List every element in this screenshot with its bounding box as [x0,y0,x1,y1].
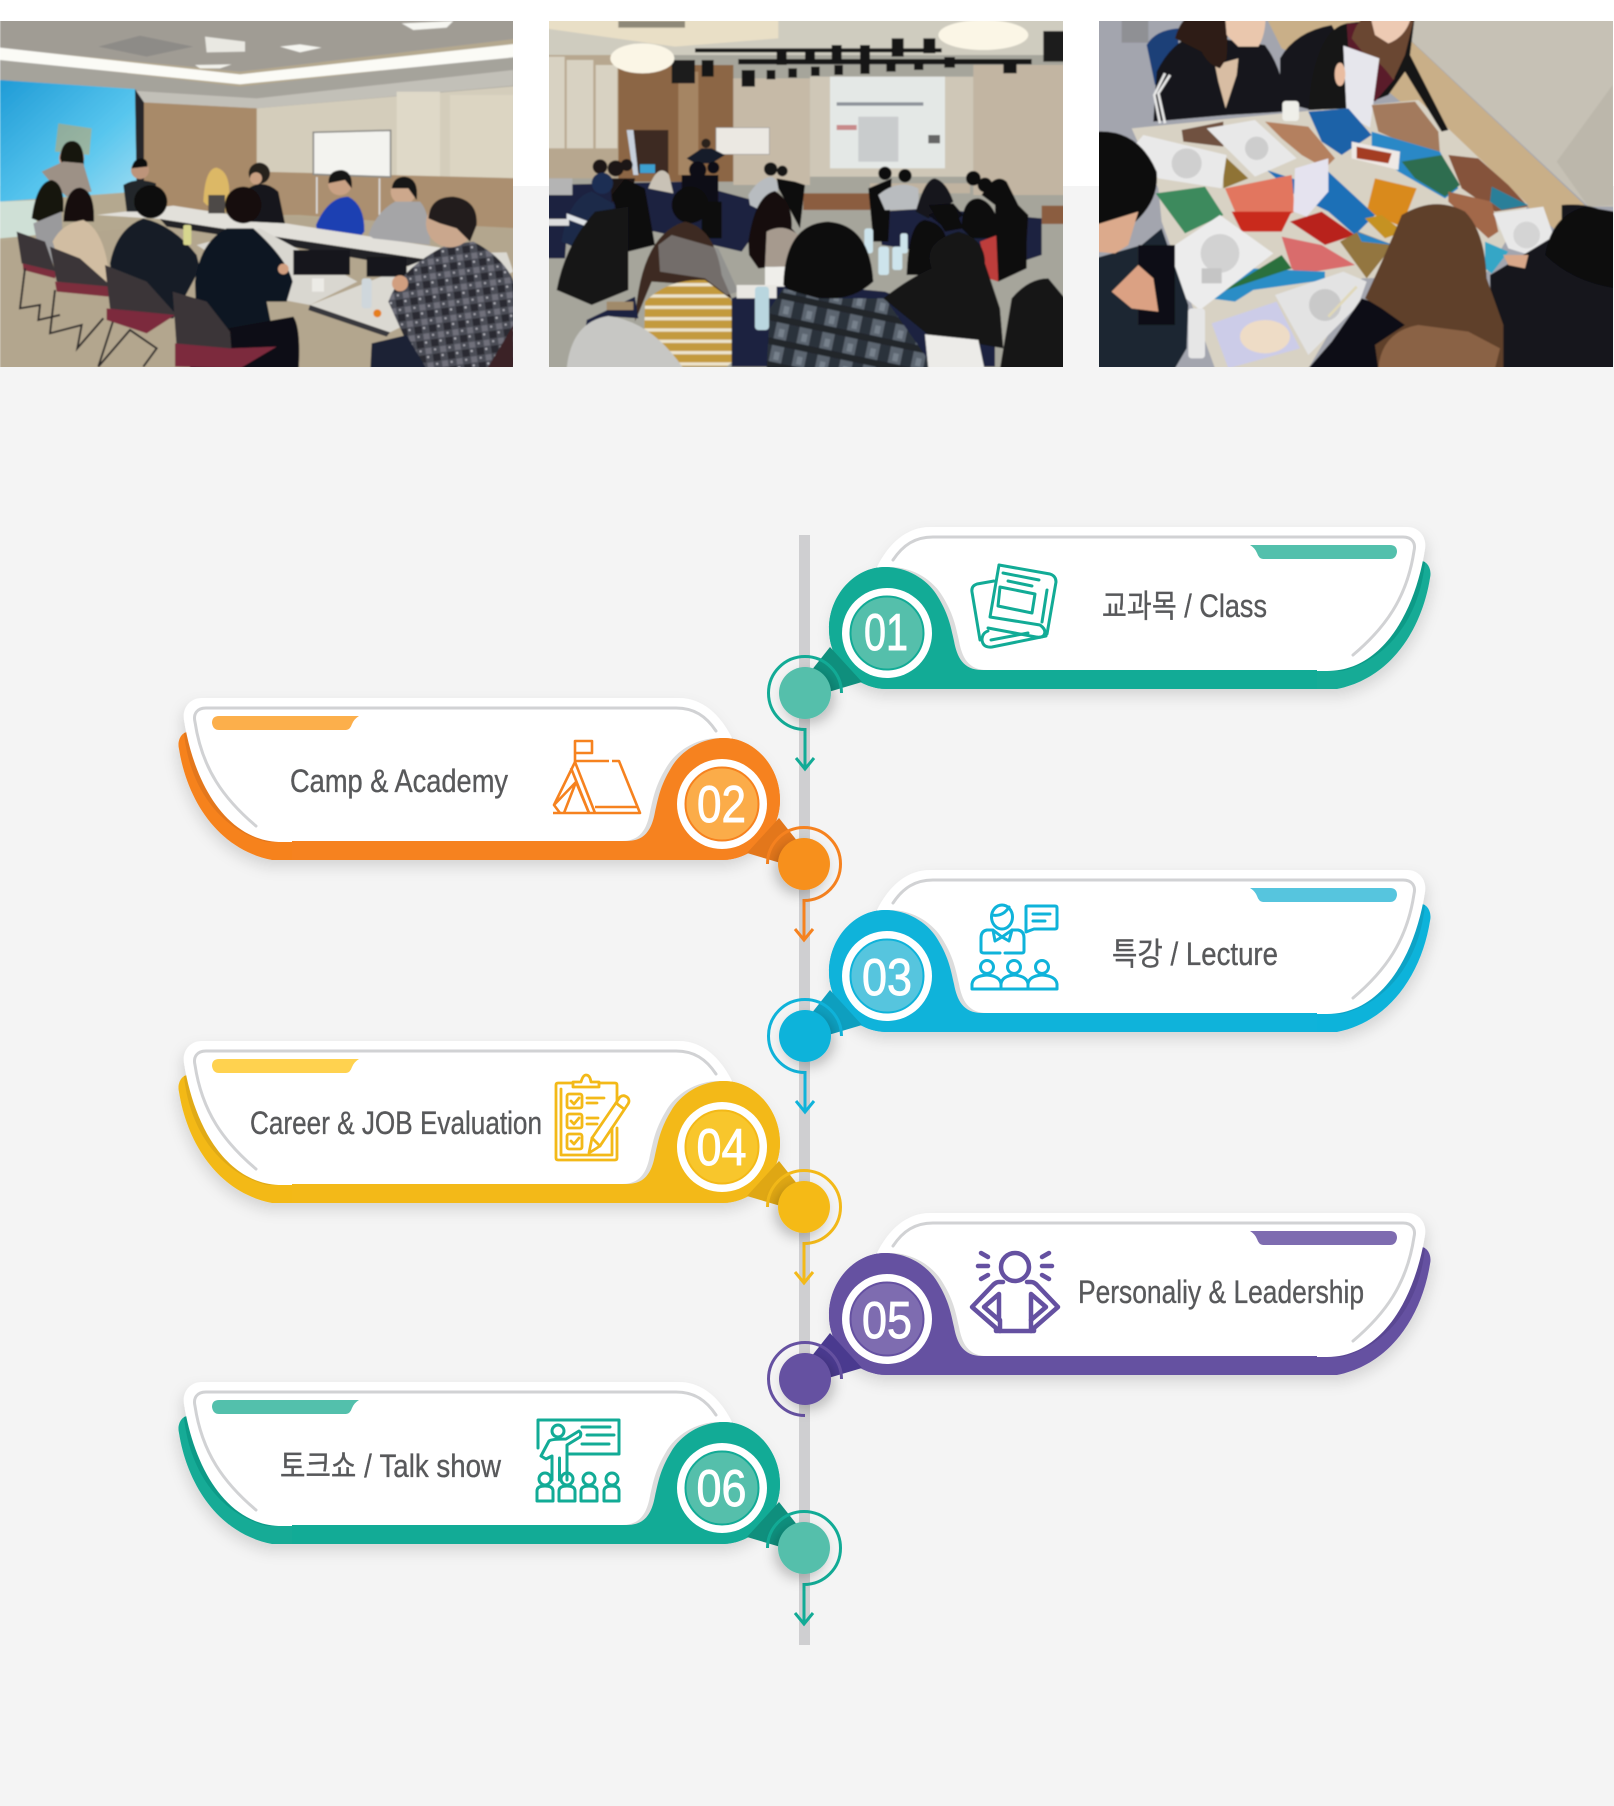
front dark people [134,185,167,218]
photo: seminar hall with presentation screen [545,15,1065,375]
table [1132,100,1528,368]
icon: tent [553,741,640,813]
number 01: 01 [864,604,908,662]
number 03: 03 [862,949,912,1007]
tables & far people [545,182,758,252]
label: personality and leadership: Personaliy & Leadership [1078,1274,1364,1310]
card 03 body [829,870,1431,1032]
left boy [1095,228,1188,368]
icon: lecturer and audience [972,905,1057,989]
photo: classroom with U-shaped tables [0,15,520,375]
card 01 body [829,527,1431,689]
card 06: talk show [178,1382,840,1624]
icon: book [972,565,1056,647]
label: career and job evaluation: Career & JOB Evaluation [250,1105,542,1141]
left women & chairs [32,180,64,222]
icon: clipboard with pencil [556,1075,629,1160]
back row people [58,152,86,164]
card 02: camp and academy [178,698,840,940]
card 05 body [829,1213,1431,1375]
collage pieces [1308,108,1372,155]
number 05: 05 [862,1292,912,1350]
card 02 body [178,698,780,860]
card 01: class [768,527,1431,769]
photo: workshop table with collage materials [1095,15,1614,375]
card 03: lecture [768,870,1431,1112]
tables [97,206,441,260]
number 04: 04 [696,1119,746,1177]
table items [362,278,372,308]
card 06 body [178,1382,780,1544]
label: lecture: 특강 / Lecture [1112,936,1278,972]
worksheets [1133,135,1227,188]
card 04: career and job evaluation [178,1041,840,1283]
front woman & right person [1490,204,1614,368]
label: class: 교과목 / Class [1102,588,1267,624]
speaker [701,139,711,148]
timeline vertical bar [799,535,810,1645]
icon: presenter and audience [537,1420,619,1501]
number 06: 06 [696,1460,746,1518]
label: talk show: 토크쇼 / Talk show [280,1448,502,1484]
number 02: 02 [697,776,746,834]
stage lighting truss [695,38,1032,87]
card 04 body [178,1041,780,1203]
front right man [388,242,520,375]
icon: person with hands on hips [972,1253,1058,1331]
card 05: personality and leadership [768,1213,1431,1416]
mid people [612,178,655,252]
top people [1153,35,1286,122]
label: camp and academy: Camp & Academy [290,763,508,799]
